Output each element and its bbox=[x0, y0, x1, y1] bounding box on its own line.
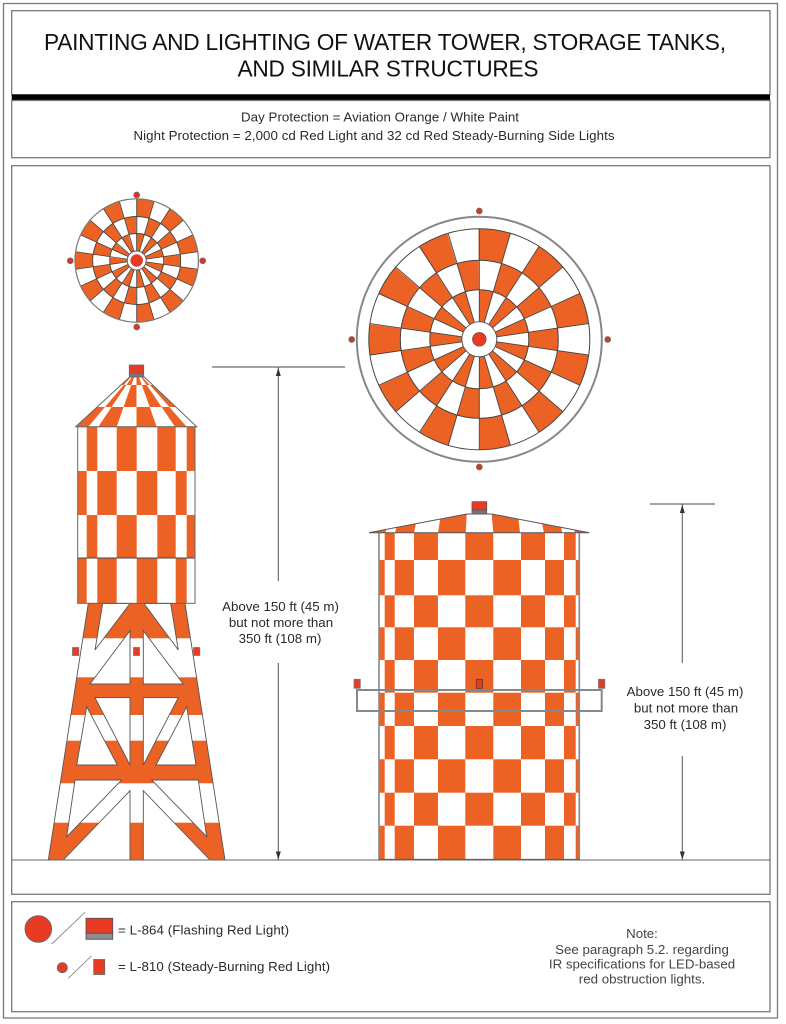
heading: title text: PAINTING AND LIGHTING OF WATER TOWER, STORAGE TANKS, bbox=[44, 29, 726, 55]
center flashing light bbox=[472, 332, 486, 346]
note: IR specifications for LED-based bbox=[549, 956, 735, 972]
side lights: L-810 on tower bbox=[72, 648, 200, 656]
legend: L-864: = L-864 (Flashing Red Light) bbox=[118, 922, 289, 938]
label: height range: but not more than bbox=[634, 700, 738, 716]
note: red obstruction lights. bbox=[579, 972, 705, 986]
label: height range bbox=[627, 684, 743, 732]
note bbox=[549, 926, 735, 986]
beacon: L-864 on tower bbox=[129, 365, 144, 377]
tower legs bbox=[40, 603, 235, 860]
large top-view plan bbox=[349, 208, 611, 470]
gallery ring bbox=[357, 217, 602, 462]
storage tank elevation bbox=[354, 502, 605, 860]
water tower elevation bbox=[40, 365, 235, 860]
tank body bbox=[78, 427, 195, 603]
checker rings bbox=[84, 208, 190, 313]
conical roof bbox=[76, 377, 197, 427]
note: See paragraph 5.2. regarding bbox=[555, 942, 729, 957]
panel: title bbox=[12, 11, 770, 95]
legend: L-864 bbox=[25, 912, 289, 944]
gallery walkway bbox=[357, 690, 602, 711]
heavy divider bar bbox=[12, 94, 770, 100]
center flashing light bbox=[131, 254, 143, 266]
note: Note: bbox=[626, 926, 658, 941]
shallow roof bbox=[369, 514, 590, 533]
label: height range: but not more than bbox=[229, 615, 333, 630]
checker rings bbox=[385, 245, 574, 434]
beacon: L-864 on tank bbox=[472, 502, 487, 514]
label: height range bbox=[222, 599, 339, 646]
panel: protection summary bbox=[12, 100, 770, 158]
side lights bbox=[67, 192, 206, 330]
legend: L-810: = L-810 (Steady-Burning Red Light) bbox=[118, 959, 330, 974]
dimension: water tower height bbox=[212, 367, 345, 860]
label: height range: Above 150 ft (45 m) bbox=[222, 599, 339, 614]
side lights: L-810 on tank bbox=[354, 679, 605, 688]
side lights bbox=[349, 208, 611, 470]
small top-view plan bbox=[67, 192, 206, 330]
text: day protection: Day Protection = Aviation Orange / White Paint bbox=[241, 110, 519, 124]
panel: main diagram bbox=[12, 166, 770, 894]
heading: title text: AND SIMILAR STRUCTURES bbox=[238, 56, 538, 82]
text: night protection: Night Protection = 2,000 cd Red Light and 32 cd Red Steady-Burning Side Lights bbox=[134, 128, 615, 143]
panel: legend and note bbox=[12, 902, 770, 1012]
ground line bbox=[12, 859, 770, 861]
label: height range: 350 ft (108 m) bbox=[239, 631, 321, 646]
legend: L-810 bbox=[57, 956, 330, 978]
tank body bbox=[379, 533, 579, 860]
dimension: storage tank height bbox=[627, 504, 743, 860]
label: height range: Above 150 ft (45 m) bbox=[627, 684, 743, 699]
heading: title text bbox=[44, 29, 726, 82]
label: height range: 350 ft (108 m) bbox=[644, 717, 726, 732]
